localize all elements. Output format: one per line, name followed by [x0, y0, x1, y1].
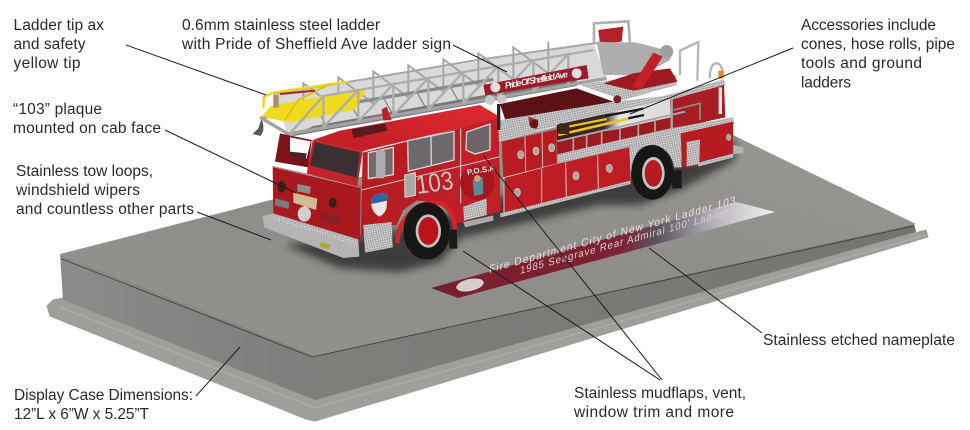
- label: plaque: “103” plaque: [13, 101, 102, 118]
- label: accessories: cones, hose rolls, pipe: [801, 36, 955, 53]
- fire truck model: [253, 21, 743, 260]
- hose well: [500, 88, 613, 124]
- label: ladder sign: 0.6mm stainless steel ladder: [182, 17, 380, 34]
- label: case dimensions: [14, 387, 193, 423]
- label: mudflaps: [573, 385, 746, 421]
- label: mudflaps: window trim and more: [573, 404, 734, 421]
- leader lines: [126, 45, 793, 396]
- label: ladder sign: with Pride of Sheffield Ave ladder sign: [181, 36, 451, 53]
- rear wheel: [631, 145, 673, 200]
- ladder far truss: [263, 42, 637, 136]
- label: plaque: [13, 101, 161, 137]
- FDNY shield: [371, 193, 387, 217]
- cab far side section: [275, 133, 312, 167]
- unit number: 103: [414, 167, 455, 200]
- 103 plaque: [293, 193, 317, 210]
- upper side compartments: [502, 129, 557, 178]
- front wheel: [403, 202, 450, 260]
- label: tow loops: Stainless tow loops,: [16, 163, 153, 180]
- rear mudflap: [672, 170, 682, 188]
- compartment post and warning light: [497, 95, 621, 130]
- label: ladder tip: [14, 17, 104, 72]
- turntable and hydraulics: [580, 21, 677, 100]
- label: accessories: Accessories include: [801, 17, 936, 34]
- nameplate: 1985 Seagrave Rear Admiral 100' Ladder: [520, 207, 729, 277]
- label: case dimensions: 12”L x 6”W x 5.25”T: [14, 406, 150, 423]
- label: tow loops: and countless other parts: [16, 201, 194, 218]
- rear upper compartment: [670, 85, 725, 129]
- label: nameplate: Stainless etched nameplate: [763, 332, 955, 349]
- cab side windows: [408, 131, 454, 171]
- label: mudflaps: Stainless mudflaps, vent,: [574, 385, 746, 402]
- cab near side: [361, 118, 501, 243]
- front bumper: [263, 213, 359, 258]
- silver diamond band: [557, 117, 734, 164]
- cab diamond plates: [363, 198, 493, 253]
- nameplate: Fire Department City of New York Ladder 103: [489, 195, 736, 276]
- label: ladder tip: yellow tip: [14, 55, 80, 72]
- rear handrails and beacon: [680, 42, 723, 81]
- label: ladder tip: Ladder tip ax: [14, 17, 104, 34]
- nameplate: [431, 195, 775, 298]
- rear fender diamond plate: [629, 132, 682, 182]
- label: tow loops: [15, 163, 194, 218]
- ladder near truss: [260, 50, 607, 137]
- front mudflap: [449, 229, 457, 249]
- equipment bay with rails: [557, 98, 685, 155]
- display case base: [47, 100, 928, 421]
- label: tow loops: windshield wipers: [15, 182, 140, 199]
- pipe tools: [558, 109, 644, 135]
- rear body panels: [681, 122, 743, 167]
- label: ladder sign: [181, 17, 451, 53]
- cab front face: [273, 166, 361, 243]
- front wheel arch: [397, 202, 455, 243]
- truck shadow: [285, 140, 735, 272]
- windshield: [307, 140, 363, 187]
- label: ladder tip: and safety: [14, 36, 86, 53]
- ladder yellow tip: [253, 82, 367, 136]
- deck diamond plate: [498, 79, 725, 142]
- label: accessories: ladders: [801, 74, 851, 92]
- label: accessories: tools and ground: [801, 55, 922, 72]
- ladder name sign: [483, 65, 589, 105]
- lower side compartments: [500, 147, 631, 217]
- label: plaque: mounted on cab face: [13, 120, 161, 137]
- POSA emblem: [460, 165, 495, 200]
- label: case dimensions: Display Case Dimensions:: [14, 387, 193, 404]
- cab roof: [313, 105, 498, 152]
- label: accessories: [801, 17, 955, 92]
- ladder name sign: Pride Of Sheffield Ave: [504, 69, 569, 91]
- cab near side: P.O.S.A: [466, 163, 496, 177]
